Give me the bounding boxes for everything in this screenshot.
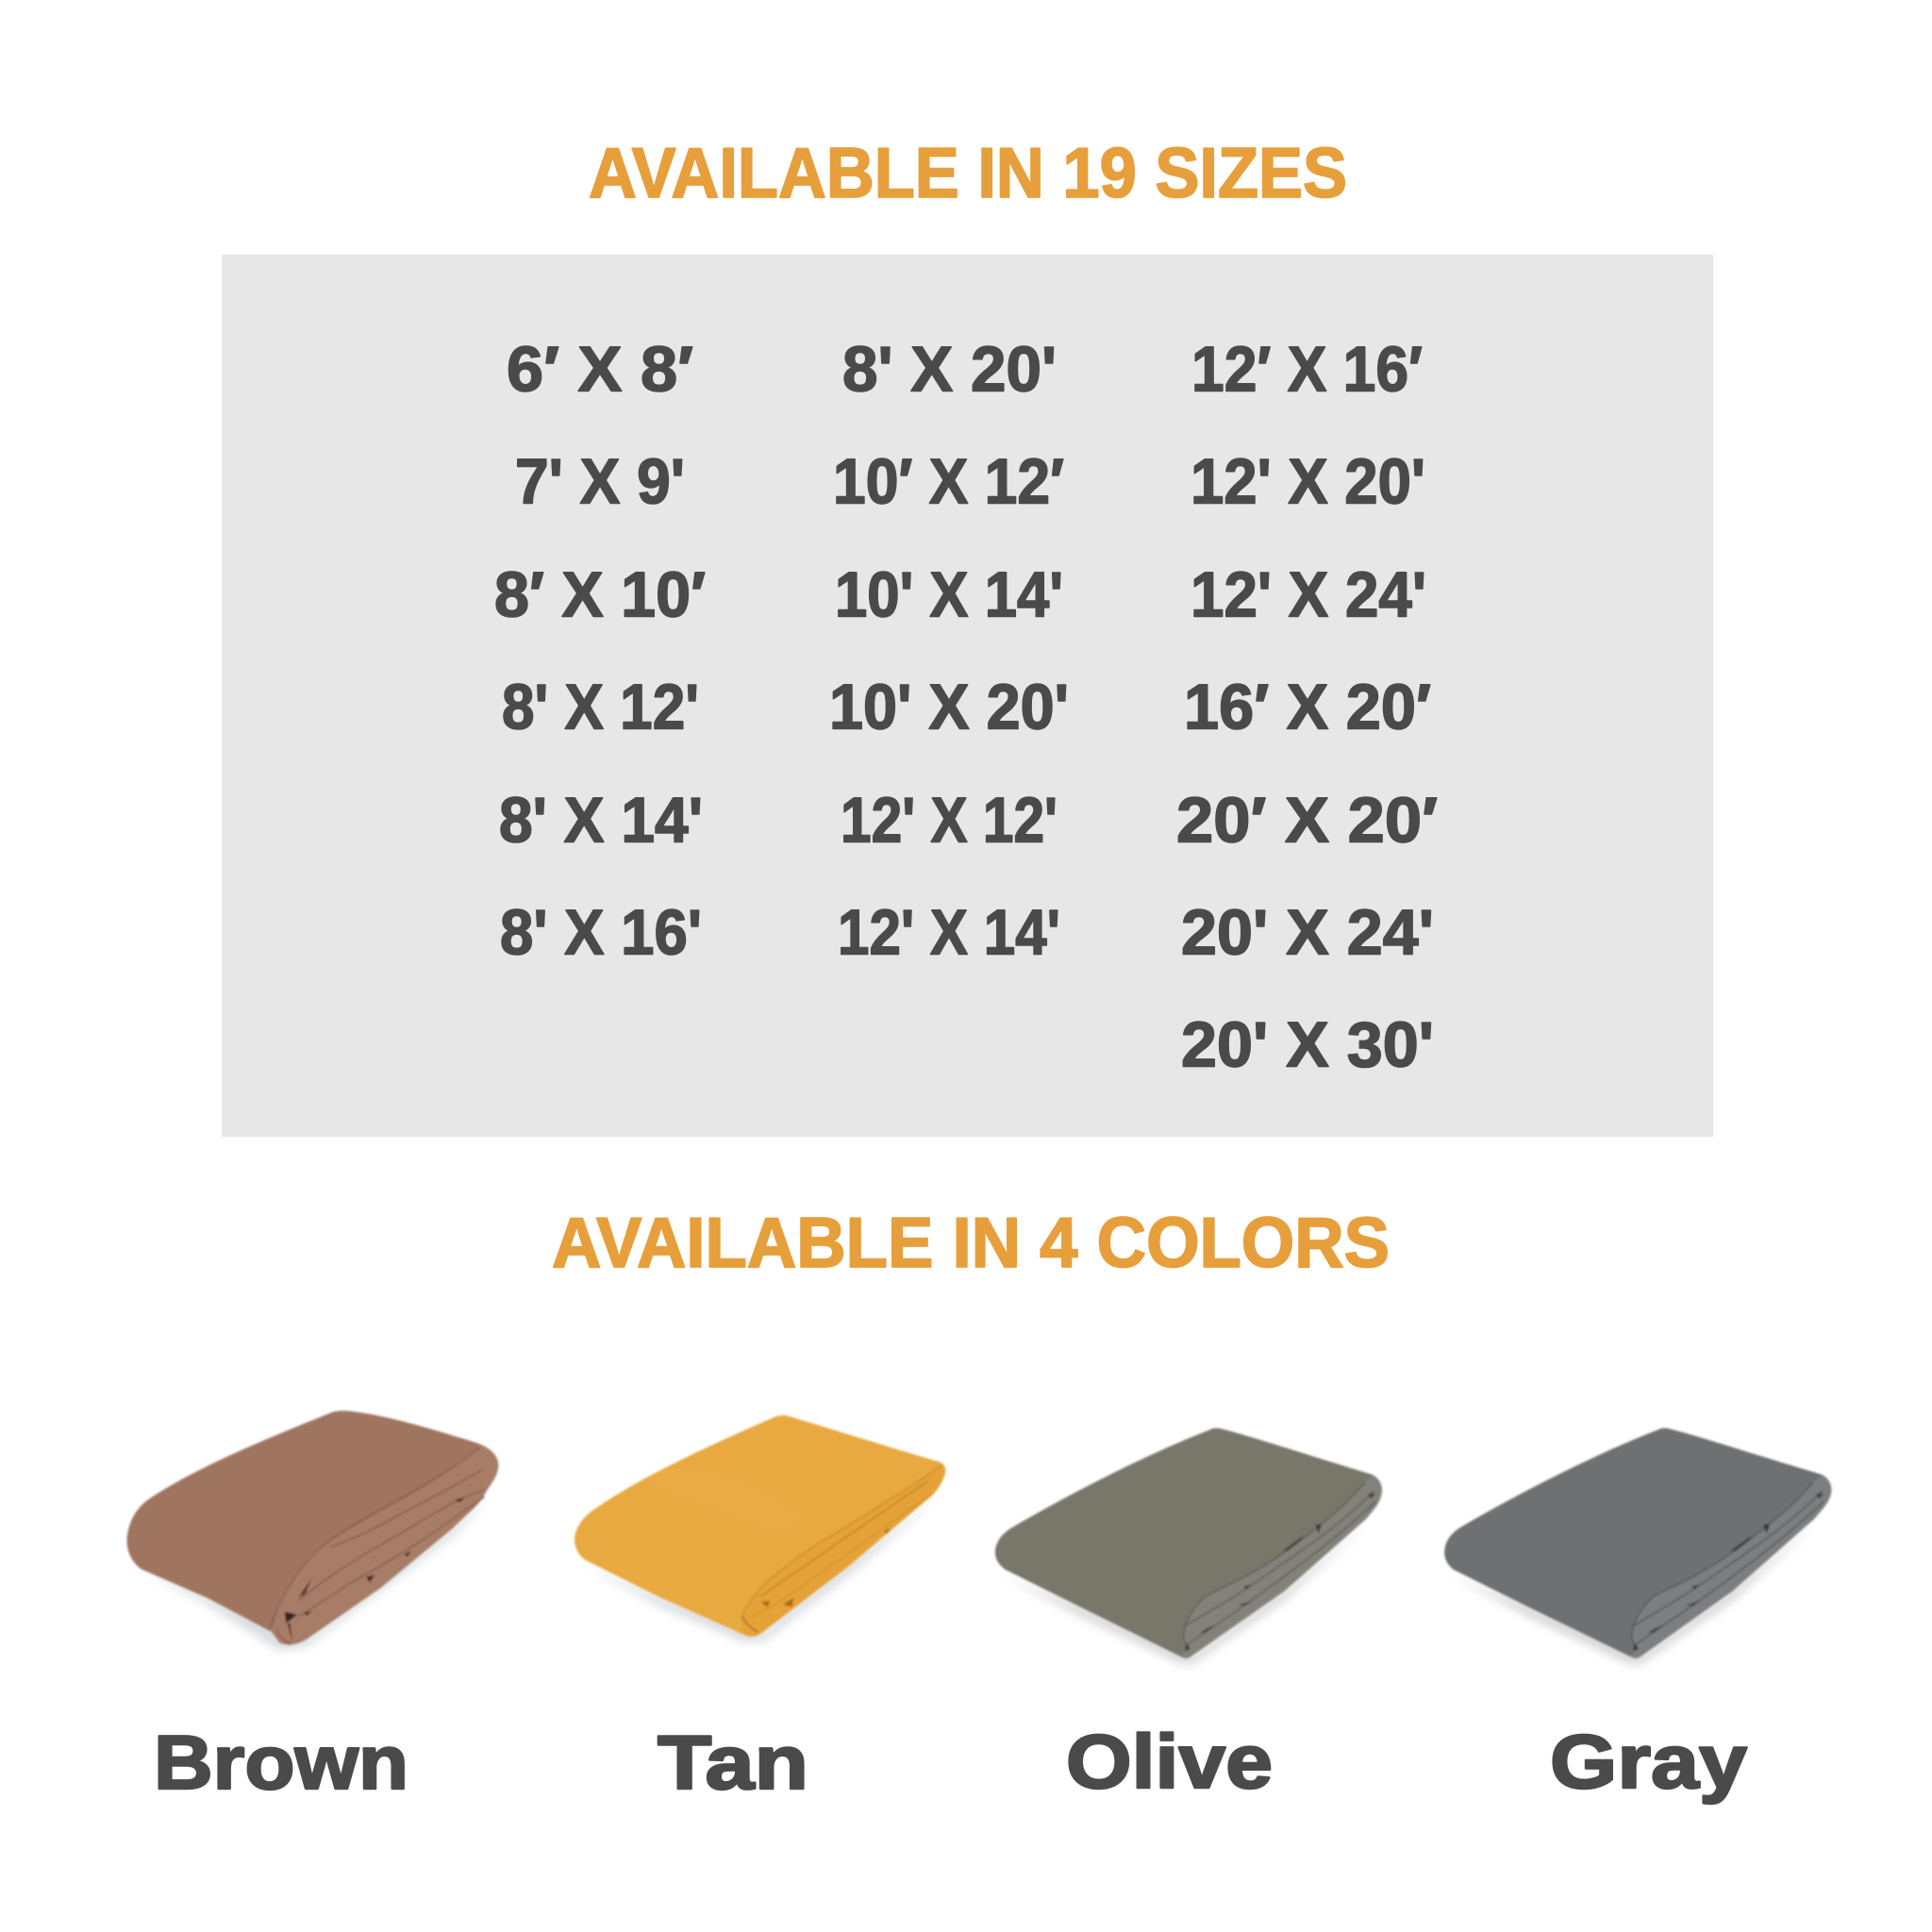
column 1 sizes: 8′ X 10′ [494, 558, 706, 630]
column 1 sizes: 6′ X 8′ [507, 334, 693, 406]
column 2 sizes: 10' X 14' [835, 558, 1063, 630]
panel background [222, 255, 1713, 1137]
heading: available in 19 sizes: AVAILABLE IN 19 SIZES [589, 133, 1347, 212]
column 3 sizes: 12' X 24' [1191, 558, 1426, 630]
column 1 sizes: 7' X 9' [515, 445, 685, 517]
column 2 sizes [829, 334, 1069, 968]
swatch: olive tarp [995, 1428, 1382, 1663]
column 3 sizes: 20′ X 20′ [1176, 785, 1438, 857]
heading: available in 4 colors: AVAILABLE IN 4 COLORS [552, 1203, 1390, 1282]
column 1 sizes [494, 334, 706, 968]
column 2 sizes: 10' X 20' [829, 672, 1069, 743]
label: Gray: Gray [1550, 1720, 1747, 1805]
column 1 sizes: 8' X 12' [502, 672, 699, 743]
panel: sizes table [222, 255, 1713, 1137]
swatch: tan tarp [575, 1415, 945, 1641]
label: Olive: Olive [1066, 1720, 1273, 1805]
column 3 sizes: 12′ X 16′ [1191, 334, 1423, 406]
column 2 sizes: 8' X 20' [842, 334, 1057, 406]
column 3 sizes: 20' X 24' [1181, 896, 1434, 968]
column 2 sizes: 10′ X 12′ [833, 445, 1064, 517]
label: Tan: Tan [658, 1721, 808, 1806]
column 2 sizes: 12' X 14' [838, 896, 1060, 968]
column 3 sizes: 16′ X 20′ [1184, 672, 1431, 743]
label: Brown: Brown [154, 1721, 408, 1806]
column 3 sizes [1176, 334, 1438, 1081]
column 3 sizes: 12' X 20' [1191, 445, 1425, 517]
column 2 sizes: 12' X 12' [841, 785, 1058, 857]
column 3 sizes: 20' X 30' [1181, 1009, 1434, 1081]
swatch: gray tarp [1444, 1428, 1831, 1663]
swatch: brown tarp [127, 1411, 498, 1651]
column 1 sizes: 8' X 14' [499, 785, 703, 857]
column 1 sizes: 8' X 16' [500, 896, 702, 968]
